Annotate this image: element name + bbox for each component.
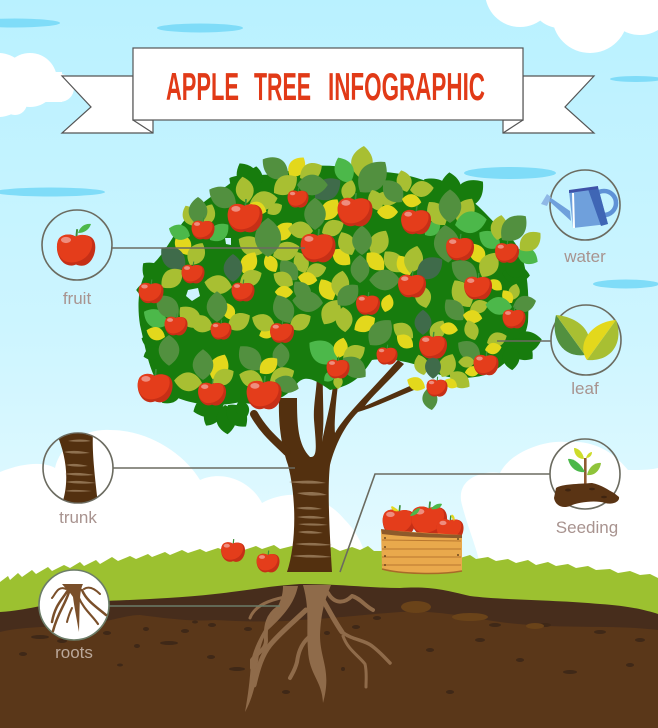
banner left tail: [62, 76, 153, 133]
callout: fruit: [42, 210, 112, 308]
soil: [0, 612, 658, 728]
banner: [62, 48, 594, 133]
icon: bark: [59, 434, 98, 502]
title: APPLE: [166, 66, 239, 109]
cloud: lower right: [461, 442, 658, 580]
callout: seeding: Seeding: [556, 518, 618, 537]
apple crate: [381, 502, 464, 573]
banner main: [133, 48, 523, 120]
grass: [0, 545, 658, 630]
trunk: [254, 360, 414, 572]
roots: [245, 585, 390, 712]
icon: apple: [57, 224, 95, 266]
canopy: [136, 145, 546, 435]
soil specks: [19, 616, 645, 694]
callout: water: [541, 170, 620, 266]
banner right tail: [503, 76, 594, 133]
dark topsoil: [0, 584, 658, 728]
leaf clusters: [140, 145, 546, 411]
callout: roots: roots: [55, 643, 93, 662]
icon: watering can: [541, 186, 616, 228]
icon: seedling: [554, 448, 619, 507]
title: [166, 66, 485, 109]
icon: leaves: [555, 315, 618, 360]
cloud: lower left: [0, 430, 368, 600]
icon: roots: [52, 584, 106, 632]
soil lumps: [401, 601, 544, 629]
callout: fruit: fruit: [63, 289, 91, 308]
apples on tree: [138, 188, 526, 409]
leader lines: [109, 248, 551, 606]
callout: leaf: leaf: [571, 379, 599, 398]
cloud: top right: [485, 0, 658, 53]
callout: trunk: trunk: [59, 508, 97, 527]
fallen apples: [221, 539, 280, 572]
title: TREE: [254, 66, 311, 109]
callout: leaf: [551, 305, 621, 398]
callout: seeding: [550, 439, 620, 537]
title: INFOGRAPHIC: [328, 66, 485, 109]
cloud: upper left: [0, 53, 74, 117]
callout: water: water: [563, 247, 606, 266]
star leaves: [136, 158, 544, 435]
callout: trunk: [43, 432, 113, 527]
sky streaks: [0, 18, 658, 288]
callout: roots: [39, 570, 109, 662]
tree: [136, 145, 546, 572]
